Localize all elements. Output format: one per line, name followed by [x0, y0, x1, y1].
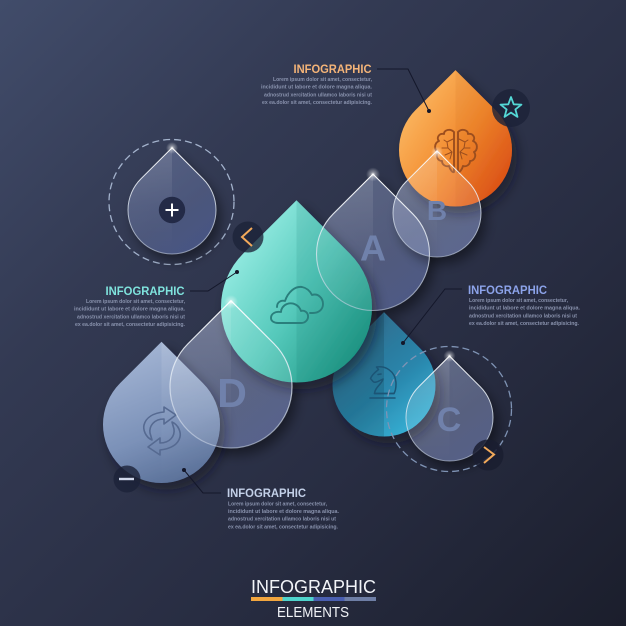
glass drop: A: A	[360, 228, 386, 268]
glass drop: plus	[128, 142, 216, 254]
drop: chess blue	[332, 312, 436, 437]
icon: cloud	[271, 287, 323, 323]
glass drop: D: D	[217, 370, 247, 416]
dashed ring: plus	[109, 140, 234, 264]
glass drop: B	[393, 146, 481, 257]
callout: teal: adnostrud xercitation ullamco laboris nisi ut	[77, 314, 185, 320]
callout: blue: ex ea.dolor sit amet, consectetur adipisicing.	[469, 321, 579, 327]
callout: orange: adnostrud xercitation ullamco laboris nisi ut	[264, 92, 372, 98]
callout: blue: Lorem ipsum dolor sit amet, consectetur,	[469, 298, 568, 304]
callout: steel: adnostrud xercitation ullamco laboris nisi ut	[228, 516, 336, 522]
glass drop: C with dashed ring: C	[437, 401, 461, 439]
callout: teal	[74, 270, 239, 328]
callout: blue	[401, 283, 580, 345]
callout: steel: INFOGRAPHIC	[227, 486, 306, 500]
drop: orange	[399, 70, 512, 207]
icon: knight	[370, 367, 396, 398]
glass bodies beneath solid drops	[128, 148, 493, 461]
callout: teal: INFOGRAPHIC	[106, 284, 185, 298]
callout: blue: incididunt ut labore et dolore magna aliqua.	[469, 306, 580, 312]
callout: teal: incididunt ut labore et dolore magna aliqua.	[74, 307, 185, 313]
callout: blue: adnostrud xercitation ullamco laboris nisi ut	[469, 313, 577, 319]
glass drop: D	[170, 295, 292, 448]
glass drop: C with dashed ring	[386, 346, 512, 472]
callout: teal: Lorem ipsum dolor sit amet, consectetur,	[86, 299, 185, 305]
callout: orange: INFOGRAPHIC	[294, 62, 372, 76]
icon: refresh arrows	[144, 407, 180, 455]
badge: right chevron	[472, 440, 504, 470]
callout: steel: incididunt ut labore et dolore magna aliqua.	[228, 509, 339, 515]
callout: orange: incididunt ut labore et dolore magna aliqua.	[261, 85, 372, 91]
icon: brain	[435, 130, 477, 172]
glass drop: A	[316, 168, 430, 311]
callout: steel	[182, 468, 339, 530]
badge: star	[492, 89, 530, 127]
badge: minus	[114, 466, 140, 492]
drop: teal	[221, 200, 372, 383]
drop: steel blue	[103, 342, 220, 483]
callout: orange	[261, 62, 431, 113]
callout: orange: ex ea.dolor sit amet, consectetur adipisicing.	[262, 100, 372, 106]
glass drop: B: B	[427, 195, 447, 226]
badge: left chevron	[232, 222, 264, 252]
footer title: ELEMENTS	[277, 604, 349, 621]
callout: orange: Lorem ipsum dolor sit amet, consectetur,	[273, 77, 372, 83]
callout: teal: ex ea.dolor sit amet, consectetur adipisicing.	[75, 322, 185, 328]
callout: steel: ex ea.dolor sit amet, consectetur adipisicing.	[228, 524, 338, 530]
footer title	[251, 577, 376, 621]
footer title: INFOGRAPHIC	[251, 577, 376, 597]
callout: blue: INFOGRAPHIC	[468, 283, 547, 297]
callout: steel: Lorem ipsum dolor sit amet, consectetur,	[228, 502, 327, 508]
